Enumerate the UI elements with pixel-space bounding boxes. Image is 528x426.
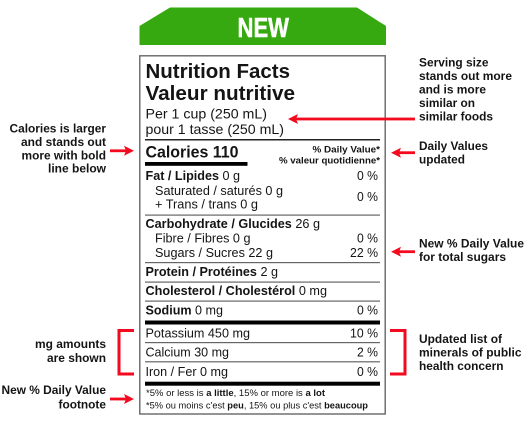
callout: minerals: minerals of public xyxy=(419,348,522,360)
row: fat: 0 % xyxy=(357,189,378,204)
callout: serving size: similar foods xyxy=(419,112,493,124)
callout: daily values xyxy=(419,141,488,167)
bracket: mg amounts xyxy=(119,330,134,374)
callout: footnote: New % Daily Value xyxy=(2,385,106,397)
row: carbohydrate: 0 % xyxy=(357,231,378,246)
text: percent daily value header: % Daily Value* xyxy=(312,145,381,155)
row: fat: 0 % xyxy=(357,168,378,183)
text: table footnote xyxy=(146,388,368,412)
arrow: footnote xyxy=(110,394,134,404)
row: fat xyxy=(146,168,378,212)
row: calcium: Calcium 30 mg xyxy=(146,344,229,360)
row: fat: + Trans / trans 0 g xyxy=(155,197,258,212)
bracket: minerals xyxy=(390,330,405,374)
callout: total sugars xyxy=(419,239,524,264)
banner: new xyxy=(140,8,386,45)
text: table footnote: *5% or less is a little, 15% or more is a lot xyxy=(146,388,326,399)
callout: serving size: Serving size xyxy=(419,58,488,70)
heading: nutrition facts title: Valeur nutritive xyxy=(146,82,295,105)
callout: calories xyxy=(10,124,107,176)
callout: mg amounts: are shown xyxy=(47,353,106,365)
callout: minerals: Updated list of xyxy=(419,334,502,346)
heading: nutrition facts title xyxy=(146,60,295,105)
callout: calories: more with bold xyxy=(22,150,106,162)
callout: serving size: stands out more xyxy=(419,71,512,83)
callout: footnote xyxy=(2,385,106,412)
row: carbohydrate: 22 % xyxy=(350,245,378,260)
callout: calories: Calories is larger xyxy=(10,124,107,136)
row: carbohydrate: Fibre / Fibres 0 g xyxy=(155,231,250,246)
text: table footnote: *5% ou moins c'est peu, 15% ou plus c'est beaucoup xyxy=(146,401,368,412)
row: carbohydrate xyxy=(146,216,378,260)
row: calcium: 2 % xyxy=(357,344,378,360)
panel: nutrition facts table xyxy=(140,56,385,414)
text: percent daily value header: % valeur quotidienne* xyxy=(279,155,381,165)
text: calories: Calories 110 xyxy=(146,142,238,161)
callout: mg amounts: mg amounts xyxy=(35,339,106,351)
row: iron: Iron / Fer 0 mg xyxy=(146,364,228,379)
text: serving size xyxy=(146,105,284,137)
row: potassium xyxy=(146,326,378,340)
row: fat: Fat / Lipides 0 g xyxy=(146,168,240,183)
row: fat: Saturated / saturés 0 g xyxy=(155,183,283,198)
callout: footnote: footnote xyxy=(58,400,106,412)
row: iron xyxy=(146,364,378,379)
row: sodium xyxy=(146,302,378,318)
callout: minerals xyxy=(419,334,522,373)
callout: daily values: updated xyxy=(419,155,465,167)
row: iron: 0 % xyxy=(357,364,378,379)
banner: new: NEW xyxy=(238,12,289,43)
row: cholesterol: Cholesterol / Cholestérol 0 mg xyxy=(146,283,327,298)
callout: daily values: Daily Values xyxy=(419,141,488,153)
callout: calories: line below xyxy=(48,164,106,176)
callout: mg amounts xyxy=(35,339,106,365)
callout: minerals: health concern xyxy=(419,361,504,373)
callout: serving size xyxy=(419,58,512,124)
callout: calories: and stands out xyxy=(21,137,106,149)
arrow: calories xyxy=(110,146,134,156)
row: potassium: 10 % xyxy=(350,326,378,340)
text: percent daily value header xyxy=(279,145,381,165)
callout: serving size: similar on xyxy=(419,98,475,110)
text: serving size: Per 1 cup (250 mL) xyxy=(146,105,267,121)
row: potassium: Potassium 450 mg xyxy=(146,326,250,340)
row: sodium: 0 % xyxy=(357,302,378,318)
callout: serving size: and is more xyxy=(419,84,486,96)
row: carbohydrate: Sugars / Sucres 22 g xyxy=(155,245,273,260)
callout: total sugars: for total sugars xyxy=(419,252,506,264)
heading: nutrition facts title: Nutrition Facts xyxy=(146,60,290,83)
arrow: serving size xyxy=(288,114,415,124)
row: calcium xyxy=(146,344,378,360)
text: serving size: pour 1 tasse (250 mL) xyxy=(146,121,284,137)
row: carbohydrate: Carbohydrate / Glucides 26 g xyxy=(146,216,320,231)
callout: total sugars: New % Daily Value xyxy=(419,239,524,251)
arrow: daily values xyxy=(391,148,415,158)
row: protein: Protein / Protéines 2 g xyxy=(146,264,278,279)
arrow: total sugars xyxy=(391,247,415,257)
row: sodium: Sodium 0 mg xyxy=(146,302,223,318)
